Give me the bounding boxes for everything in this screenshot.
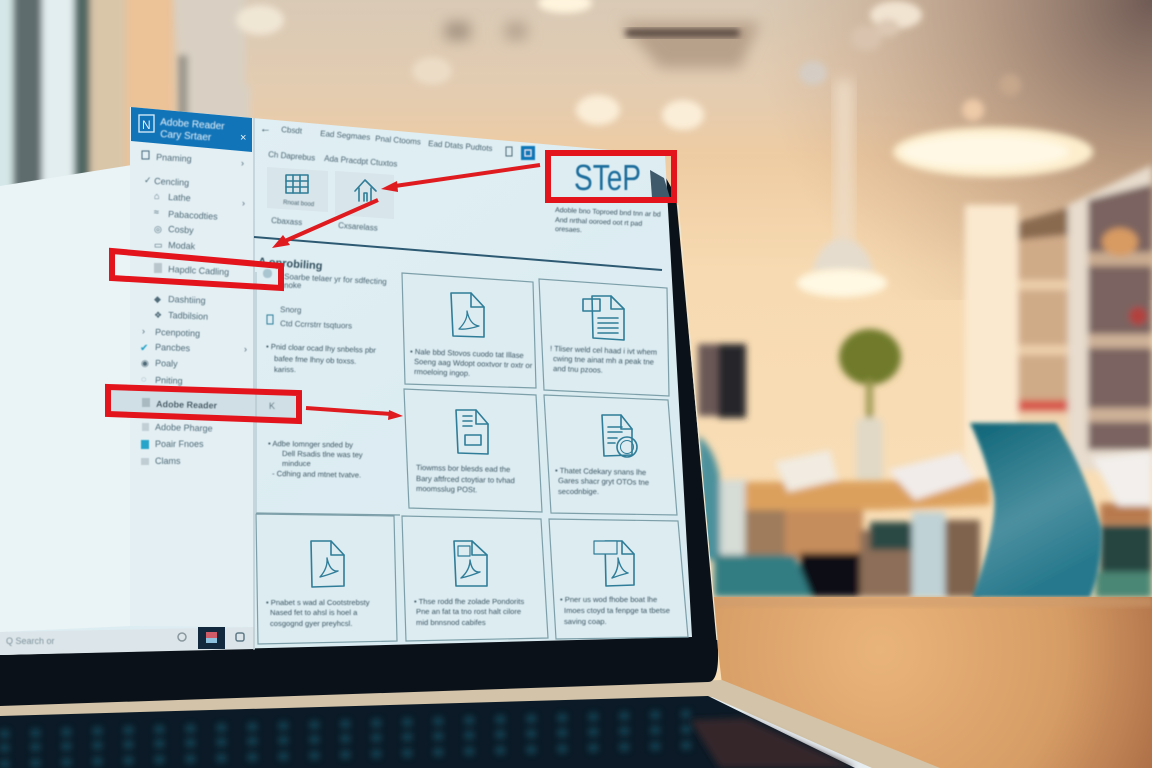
card 4: invoice document: Gares shacr gryt OTOs tne	[558, 476, 649, 487]
red arrow: step to home tile	[381, 165, 540, 192]
section text column: A oprobiling	[258, 256, 323, 272]
card 2: documents: ! Tliser weld cel haad i ivt whem	[550, 344, 657, 357]
card 7: PDF with tag: saving coap.	[564, 617, 607, 626]
sidebar menu: ◆	[154, 294, 161, 304]
card 4: invoice document: • Thatet Cdekary snans lhe	[555, 466, 646, 477]
card 4: invoice document	[544, 395, 677, 515]
laptop base and keyboard	[0, 680, 940, 768]
laptop screen	[0, 107, 692, 655]
laptop screen bezel	[0, 170, 718, 706]
section text column: kariss.	[274, 365, 296, 374]
card 1: PDF: rmoeloing ingop.	[414, 367, 470, 378]
sidebar menu: Pcenpoting	[155, 327, 200, 339]
tile: home: Cxsarelass	[338, 221, 378, 233]
top toolbar: Ead Segmaes	[320, 129, 371, 142]
sidebar menu: Pancbes	[155, 342, 191, 353]
sidebar menu: Cencling	[154, 176, 189, 188]
sidebar menu: Pnaming	[156, 152, 192, 164]
card 7: PDF with tag	[549, 519, 688, 639]
sidebar menu: ›	[242, 198, 245, 208]
top toolbar: ←	[260, 123, 271, 135]
lower sidebar menu: Poair Fnoes	[155, 439, 204, 449]
top toolbar: Pnal Ctooms	[375, 134, 421, 147]
sidebar menu: ▭	[154, 240, 163, 250]
selected Adobe Reader row	[110, 389, 298, 420]
step description: oresaes.	[555, 226, 582, 234]
card 5: PDF: cosgognd gyer preyhcsl.	[270, 619, 352, 628]
section text column: Dell Rsadis tlne was tey	[282, 449, 363, 459]
lower sidebar menu: Clams	[155, 456, 181, 466]
sidebar menu: Tadbilsion	[168, 310, 208, 322]
red arrow: home tile to sidebar item	[272, 200, 378, 248]
tool tiles: Ch Daprebus	[268, 150, 316, 163]
card 6: PDF with notes: mid bnnsnod cabifes	[416, 618, 486, 627]
screen corner shadow	[650, 170, 670, 198]
section text column: noke	[284, 281, 302, 290]
sidebar menu: ✓	[144, 175, 152, 185]
section text column: minduce	[282, 459, 311, 468]
sidebar menu: Pabacodties	[168, 209, 218, 222]
sidebar menu: Dashtiing	[168, 294, 206, 306]
red highlight box: Hapdlc Cadling	[112, 251, 281, 288]
red highlight box: Adobe Reader	[108, 387, 299, 421]
sidebar menu: ≈	[154, 207, 159, 217]
main divider	[254, 237, 662, 270]
section text column: Ctd Ccrrstrr tsqtuors	[280, 319, 352, 331]
window and column at left	[0, 0, 250, 202]
tile: calendar	[267, 167, 328, 227]
sidebar menu: Lathe	[168, 192, 191, 203]
pendant lamp	[797, 80, 887, 297]
card 2: documents: cwing tne ainat mh a peak tne	[553, 354, 654, 367]
section text column: - Cdhing and mtnet tvatve.	[272, 469, 361, 480]
tile: calendar: Cbaxass	[271, 216, 303, 227]
red arrow: Adobe Reader to card	[306, 408, 403, 420]
dark wall screen	[698, 344, 746, 418]
section text column: bafee fme lhny ob toxss.	[274, 354, 357, 366]
tile: calendar: Rnoat bood	[283, 200, 314, 208]
loose white sheet at left	[0, 165, 132, 632]
sidebar header: Adobe Reader	[160, 117, 226, 133]
plant	[839, 329, 901, 483]
card 6: PDF with notes	[402, 516, 548, 641]
card 5: PDF: • Pnabet s wad al Cootstrebsty	[266, 598, 370, 607]
sidebar header: N	[142, 118, 151, 132]
lower sidebar menu: Adobe Pharge	[155, 422, 213, 434]
card 5: PDF	[256, 514, 397, 644]
sidebar menu: Hapdlc Cadling	[168, 264, 229, 277]
sidebar menu: ◎	[154, 224, 162, 234]
sidebar menu: ›	[241, 158, 244, 168]
card 7: PDF with tag: Imoes ctoyd ta fenpge ta tbetse	[564, 606, 670, 615]
sidebar menu: ◉	[141, 358, 149, 368]
section text column: • Pnid cloar ocad lhy snbelss pbr	[266, 342, 377, 355]
step description: And nrthal ooroed oot rt pad	[555, 217, 642, 228]
section text column: • Adbe Iomnger snded by	[268, 439, 353, 449]
wooden desk	[712, 597, 1152, 768]
sidebar menu	[140, 151, 247, 386]
card 6: PDF with notes: Pne an fat ta tno rost halt cilore	[416, 607, 521, 616]
sidebar header	[131, 107, 252, 152]
sidebar	[110, 107, 298, 650]
tool tiles	[267, 150, 398, 233]
taskbar: Q Search or	[6, 636, 55, 646]
red highlight box: Step	[548, 153, 674, 200]
card 3: form document: moomsslug POSt.	[416, 484, 477, 494]
card 2: documents	[539, 279, 669, 396]
top toolbar: Ead Dtats Pudtots	[428, 139, 493, 153]
card 1: PDF: Soeng aag Wdopt ooxtvor tr oxtr or	[414, 357, 533, 370]
sidebar menu: ›	[142, 326, 145, 336]
sidebar header: Cary Srtaer	[160, 129, 212, 144]
section text column	[258, 256, 387, 480]
table and chairs	[698, 423, 1152, 598]
lower sidebar menu	[141, 422, 213, 466]
card 3: form document	[404, 389, 542, 512]
card 2: documents: and tnu pzoos.	[553, 364, 603, 375]
sidebar menu: ✔	[140, 343, 148, 354]
sidebar menu: ❖	[154, 310, 162, 320]
card 1: PDF: • Nale bbd Stovos cuodo tat Illase	[410, 347, 524, 360]
top toolbar: Cbsdt	[281, 125, 303, 136]
card 6: PDF with notes: • Thse rodd fhe zolade Pondorits	[414, 597, 524, 606]
top toolbar	[260, 123, 535, 160]
selected Adobe Reader row: K	[269, 401, 275, 411]
sidebar menu: Modak	[168, 240, 196, 251]
step description	[555, 207, 661, 234]
sidebar menu: ◌	[141, 374, 146, 384]
sidebar menu: ›	[244, 344, 247, 354]
card 7: PDF with tag: • Pner us wod fhobe boat lhe	[560, 595, 657, 604]
sidebar header: ×	[240, 132, 246, 144]
card 3: form document: Bary aftfrced ctoytiar to tvhad	[416, 474, 515, 485]
card 3: form document: Tiowmss bor blesds ead the	[416, 463, 510, 474]
tool tiles: Ada Pracdpt Ctuxtos	[324, 154, 398, 169]
section text column: Soarbe telaer yr for sdfecting	[284, 272, 387, 286]
section text column: Snorg	[280, 305, 302, 315]
selected Adobe Reader row: Adobe Reader	[156, 399, 218, 411]
STEP heading: STeP	[574, 157, 641, 198]
sidebar menu: Pniting	[155, 375, 183, 386]
step description: Adoble bno Toproed bnd tnn ar bd	[555, 207, 661, 219]
sidebar menu: ⌂	[154, 191, 159, 201]
bookshelves	[965, 165, 1152, 480]
sidebar menu: Poaly	[155, 358, 178, 369]
card 4: invoice document: secodnbige.	[558, 487, 599, 496]
card 5: PDF: Nased fet to ahsl is hoel a	[270, 608, 358, 617]
taskbar	[0, 627, 255, 655]
card 1: PDF	[402, 273, 536, 388]
sidebar menu: Cosby	[168, 224, 194, 235]
ceiling lights and vents	[236, 0, 1093, 177]
